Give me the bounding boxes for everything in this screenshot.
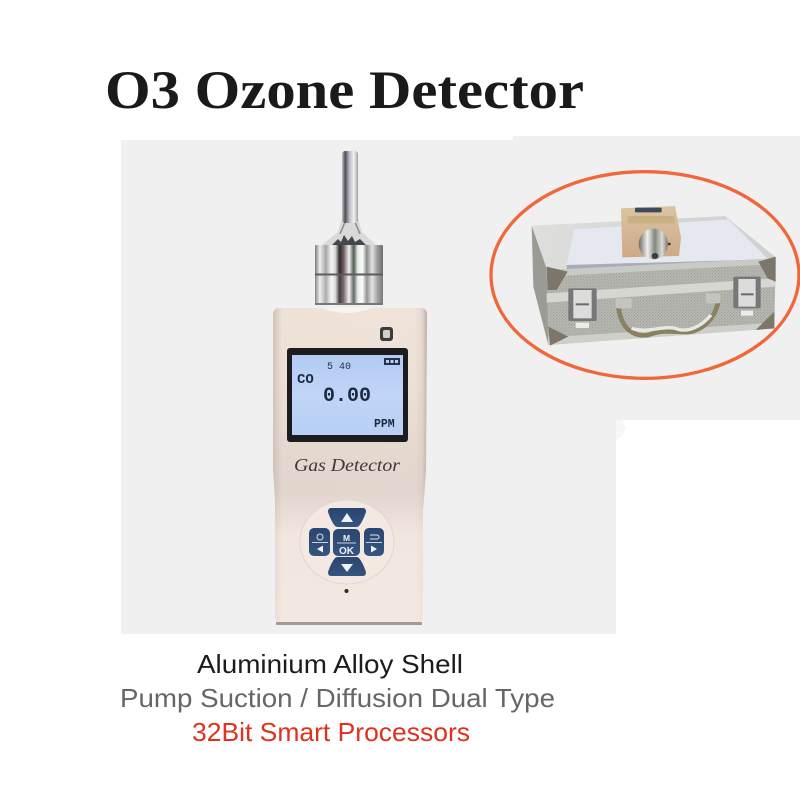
callout: orange ellipse	[491, 172, 799, 378]
icon: metal sensor housing	[315, 245, 383, 305]
button: up	[328, 508, 366, 527]
feature: aluminium shell: Aluminium Alloy Shell	[197, 649, 463, 679]
LCD screen: PPM	[374, 418, 395, 431]
device body	[273, 308, 427, 623]
small detector on case	[621, 206, 681, 259]
carrying case photo	[491, 172, 799, 378]
LCD screen	[287, 348, 408, 442]
keypad	[300, 500, 394, 584]
button: down	[328, 557, 366, 576]
case lid	[532, 216, 775, 273]
title: O3 Ozone Detector	[105, 60, 584, 120]
case handle	[616, 293, 720, 335]
case front	[547, 258, 776, 345]
case left side	[532, 226, 548, 345]
button: M OK: M	[343, 533, 350, 543]
LCD screen: 5 40	[327, 362, 351, 373]
button: M OK: OK	[339, 546, 355, 557]
latch right	[733, 277, 761, 316]
feature: processors: 32Bit Smart Processors	[192, 717, 470, 747]
text block: feature lines	[120, 649, 555, 747]
feature: dual type: Pump Suction / Diffusion Dual Type	[120, 683, 555, 713]
indicator light	[380, 327, 393, 341]
panel: product photo background	[121, 136, 800, 634]
LCD screen: 0.00	[323, 385, 371, 408]
button: M OK	[333, 529, 360, 557]
device label: Gas Detector	[294, 455, 401, 475]
handheld gas detector	[273, 151, 427, 625]
latch left	[568, 288, 597, 328]
button: right back	[364, 528, 384, 556]
case corners	[547, 257, 776, 346]
icon: sensor probe	[322, 151, 376, 245]
button: left power	[309, 528, 330, 556]
LCD screen: CO	[297, 372, 314, 388]
microphone dot	[344, 589, 348, 593]
